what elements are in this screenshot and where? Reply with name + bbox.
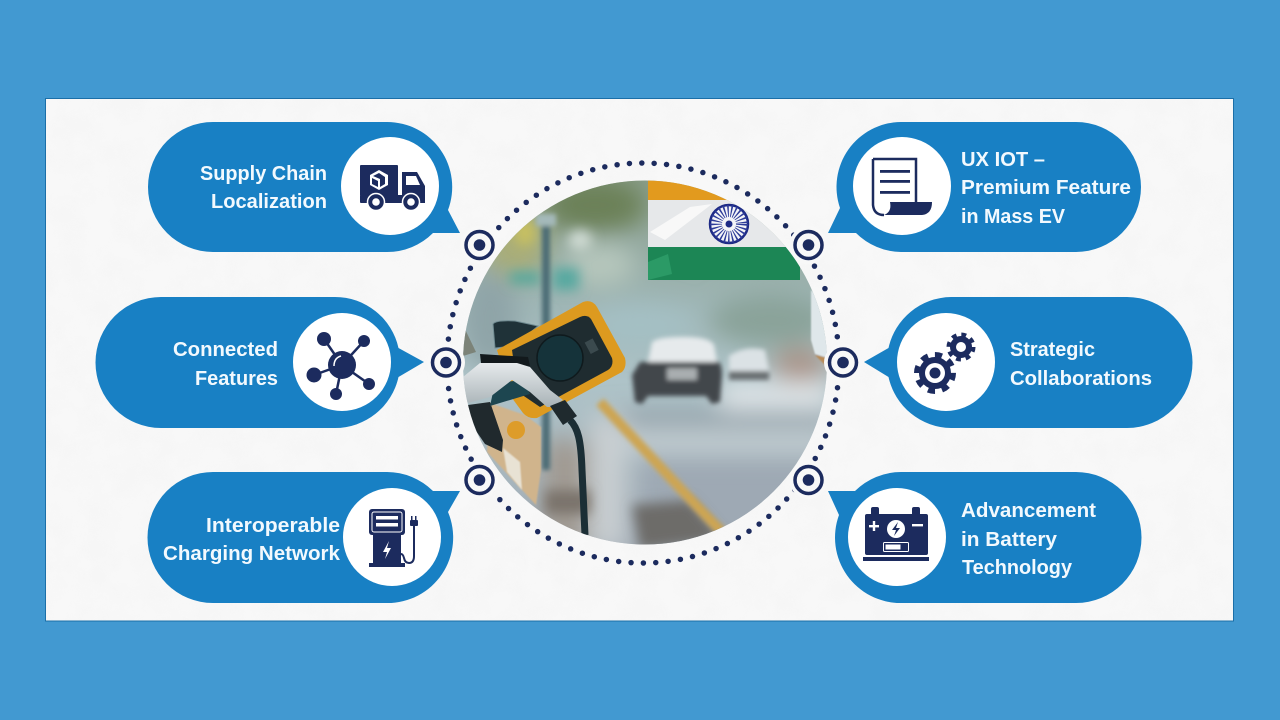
- label: Connected Features: Connected: [173, 339, 278, 361]
- label: UX IOT Premium Feature in Mass EV: UX IOT –: [961, 149, 1045, 171]
- Indian flag: [648, 180, 800, 280]
- label: UX IOT Premium Feature in Mass EV: [961, 149, 1131, 228]
- label: Advancement in Battery Technology: [961, 500, 1096, 579]
- icon: connected network: [306, 332, 375, 400]
- icon: gears: [917, 335, 973, 391]
- label: Advancement in Battery Technology: in Battery: [961, 529, 1058, 551]
- road line: [600, 402, 722, 532]
- white paper panel: [46, 98, 1234, 621]
- side mirror: [493, 321, 538, 348]
- label: Interoperable Charging Network: Interoperable: [206, 515, 340, 537]
- car body at left: [463, 325, 541, 505]
- ring node: middle right: [824, 344, 862, 382]
- blurred cars on the road: [632, 337, 769, 404]
- label: Strategic Collaborations: Collaborations: [1010, 368, 1152, 390]
- label: UX IOT Premium Feature in Mass EV: Premium Feature: [961, 177, 1131, 199]
- ring node: top left: [460, 226, 498, 264]
- label: Connected Features: [173, 339, 278, 390]
- label: Supply Chain Localization: Localization: [211, 191, 327, 213]
- panel: Interoperable Charging Network: [148, 472, 460, 603]
- panel: Connected Features: [95, 297, 424, 428]
- charging port panel: [497, 301, 626, 418]
- ring node: bottom right: [790, 461, 828, 499]
- central photo: EV charging with Indian flag: [462, 177, 830, 550]
- charging cable: [570, 420, 585, 535]
- right-edge vehicle fragment: [811, 290, 828, 368]
- icon: battery: [863, 507, 929, 561]
- label: Supply Chain Localization: [200, 163, 327, 213]
- street pole: [536, 214, 556, 470]
- label: Strategic Collaborations: [1010, 339, 1152, 390]
- label: Strategic Collaborations: Strategic: [1010, 339, 1095, 361]
- icon: delivery truck: [360, 165, 425, 210]
- dotted ring: [447, 163, 839, 563]
- label: Interoperable Charging Network: Charging Network: [163, 543, 341, 565]
- label: Advancement in Battery Technology: Technology: [962, 557, 1073, 579]
- icon: charging station: [369, 509, 418, 567]
- panel: UX IOT Premium Feature in Mass EV: [828, 122, 1141, 252]
- Ashoka chakra: [710, 205, 748, 243]
- charging plug: [463, 354, 577, 425]
- label: Interoperable Charging Network: [163, 515, 341, 565]
- panel: Advancement in Battery Technology: [828, 472, 1142, 603]
- label: UX IOT Premium Feature in Mass EV: in Mass EV: [961, 206, 1066, 228]
- label: Advancement in Battery Technology: Advancement: [961, 500, 1096, 522]
- ring node: top right: [790, 226, 828, 264]
- label: Supply Chain Localization: Supply Chain: [200, 163, 327, 185]
- ring node: bottom left: [460, 461, 498, 499]
- icon: document scroll: [873, 159, 932, 215]
- panel: Supply Chain Localization: [148, 122, 460, 252]
- panel: Strategic Collaborations: [864, 297, 1192, 428]
- label: Connected Features: Features: [195, 368, 278, 390]
- ring node: middle left: [427, 344, 465, 382]
